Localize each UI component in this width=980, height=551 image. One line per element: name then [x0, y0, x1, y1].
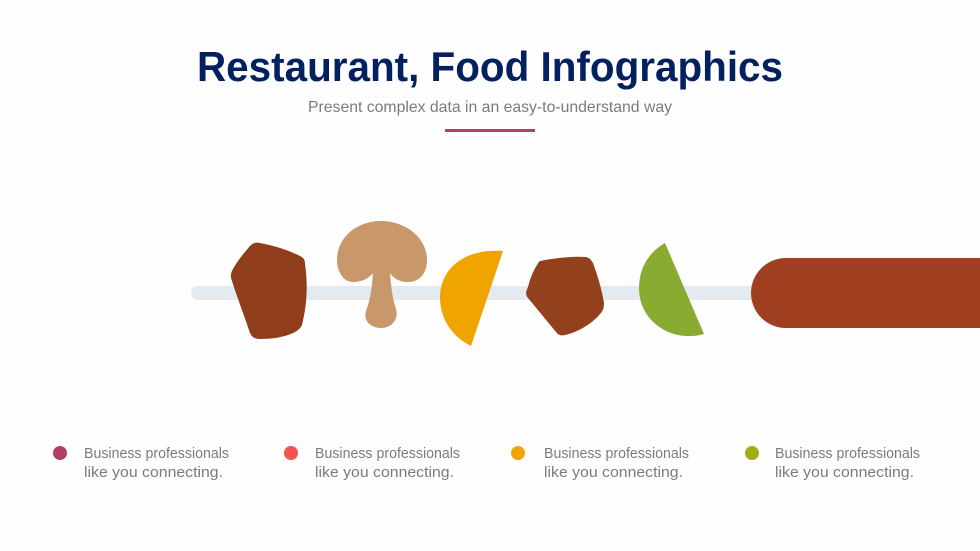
legend dot 3 [511, 446, 525, 460]
legend text 1 line 1: Business professionals [84, 445, 229, 462]
legend item 4 [745, 445, 920, 481]
yellow half slice [440, 251, 503, 346]
legend text 1 line 2: like you connecting. [84, 464, 223, 481]
legend text 4 line 2: like you connecting. [775, 464, 914, 481]
skewer illustration [191, 221, 980, 346]
legend text 2 line 2: like you connecting. [315, 464, 454, 481]
legend item 1 [53, 445, 229, 481]
legend dot 1 [53, 446, 67, 460]
legend item 2 [284, 445, 460, 481]
meat piece 1 [231, 243, 307, 339]
legend dot 4 [745, 446, 759, 460]
mushroom [337, 221, 427, 328]
legend text 3 line 2: like you connecting. [544, 464, 683, 481]
legend dot 2 [284, 446, 298, 460]
legend item 3 [511, 445, 689, 481]
meat piece 2 [526, 257, 604, 335]
title: Restaurant, Food Infographics [197, 43, 783, 90]
skewer stick [191, 286, 771, 300]
legend text 2 line 1: Business professionals [315, 445, 460, 462]
title underline [445, 129, 535, 132]
legend text 3 line 1: Business professionals [544, 445, 689, 462]
green half slice [639, 243, 704, 336]
legend text 4 line 1: Business professionals [775, 445, 920, 462]
subtitle: Present complex data in an easy-to-understand way [308, 99, 672, 116]
skewer handle [751, 258, 980, 328]
